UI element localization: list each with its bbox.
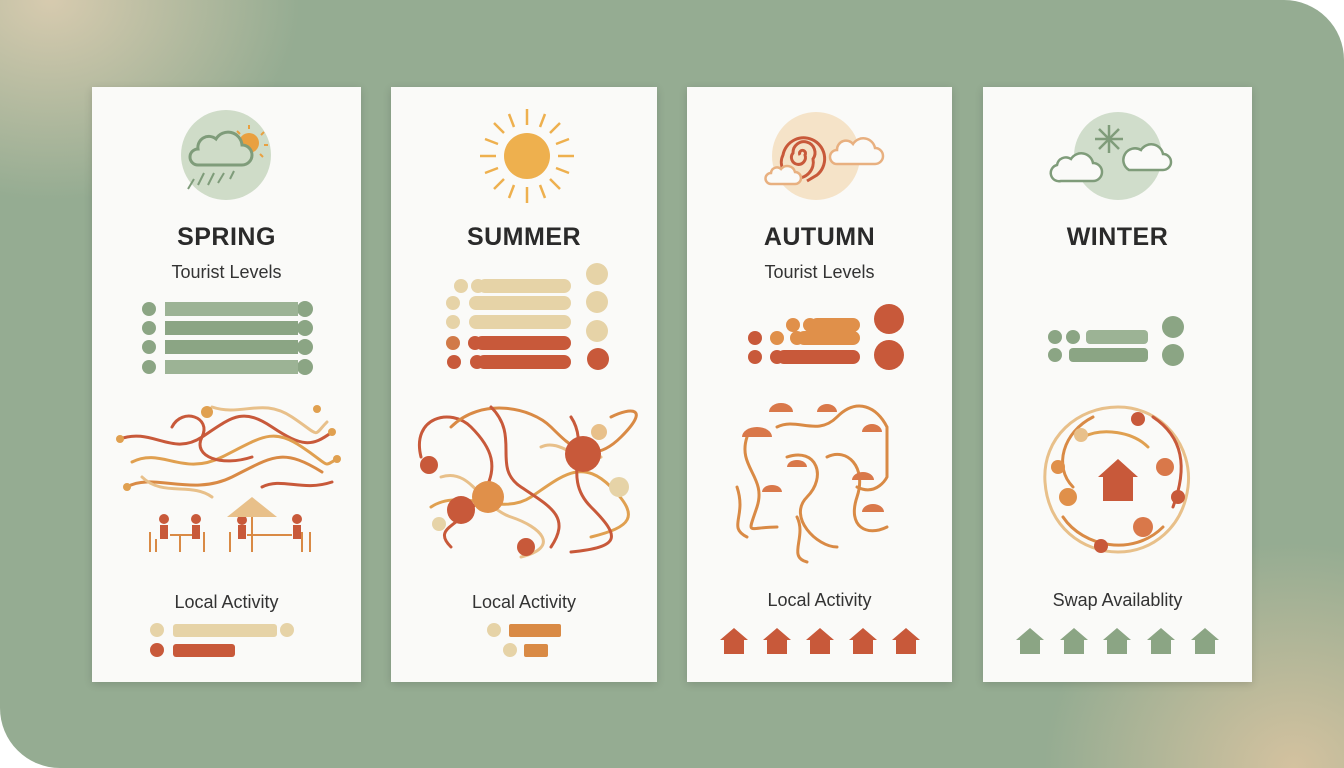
illustration: swirl around house [1045,407,1189,552]
houses [1016,628,1219,654]
heading: autumn: AUTUMN [764,223,875,251]
tourist bars [446,263,608,342]
heading: spring: SPRING [177,223,276,251]
local activity bars [487,623,501,637]
illustration: local activity network [120,407,337,497]
panel: summer [391,87,657,682]
people tables [159,514,302,539]
houses [720,628,920,654]
panel: winter [983,87,1252,682]
panel: spring [92,87,361,682]
text: tourist levels: Tourist Levels [764,262,875,282]
text: local activity: Local Activity [472,592,576,612]
tourist bars [748,304,904,370]
text: swap availability: Swap Availablity [1053,590,1182,610]
local activity bars [150,623,164,637]
icon: winter snowflake clouds [1051,112,1171,200]
illustration: mushrooms and paths [737,406,887,562]
text: local activity: Local Activity [767,590,872,610]
panel: autumn [687,87,952,682]
text: local activity: Local Activity [174,592,279,612]
icon: autumn swirl clouds [766,112,883,200]
tourist bars [142,301,313,375]
tourist bars [1048,316,1184,366]
illustration: busy tangled paths [419,407,636,557]
icon: spring cloud sun rain [116,110,341,657]
icon: sun [480,109,574,203]
text: tourist levels: Tourist Levels [171,262,282,282]
heading: winter: WINTER [1067,223,1168,251]
heading: summer: SUMMER [467,223,581,251]
